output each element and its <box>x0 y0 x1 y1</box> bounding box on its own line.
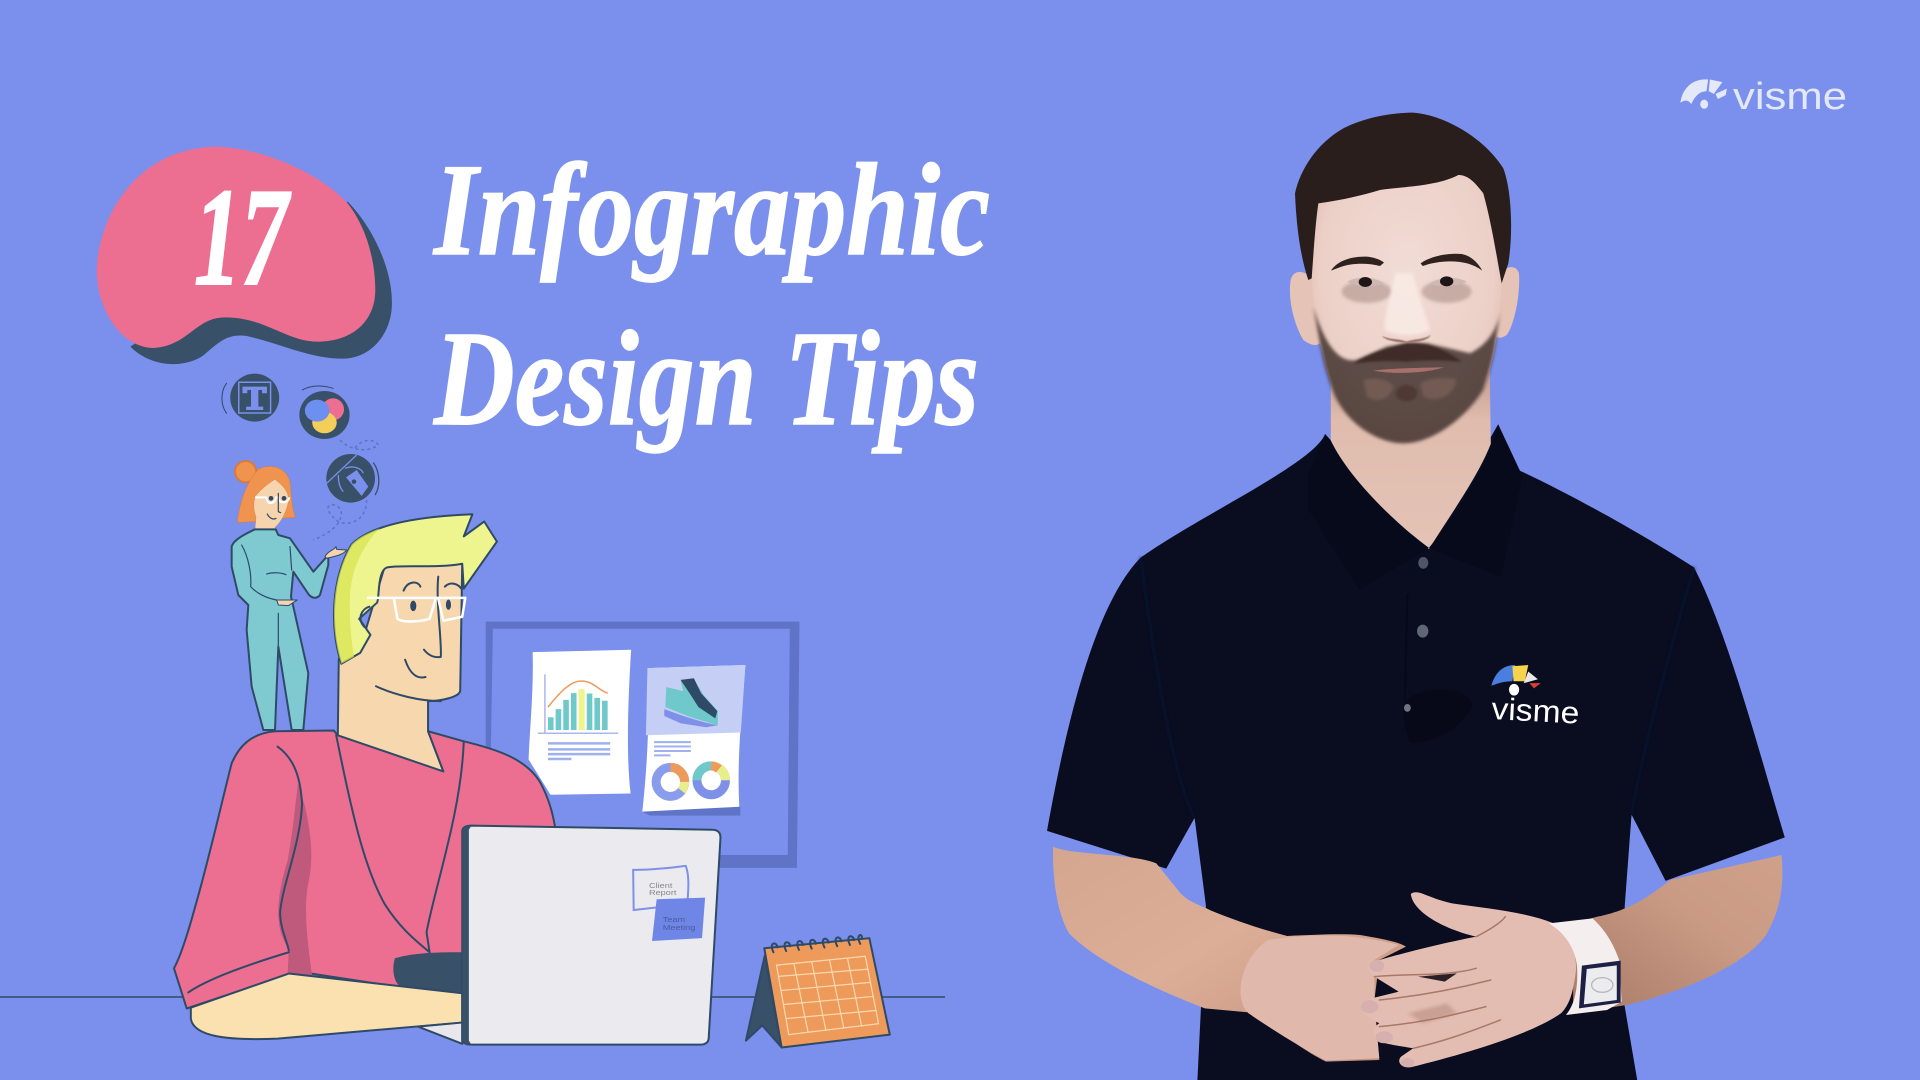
sticky note: filled: Team <box>663 916 685 924</box>
presenter head <box>1290 113 1519 443</box>
donut charts <box>656 766 726 796</box>
desk line <box>0 996 945 998</box>
beard light patches <box>1363 378 1457 400</box>
laptop <box>462 826 720 1045</box>
woman figure <box>232 461 347 730</box>
logo: visme <box>1680 76 1847 118</box>
badge blob <box>97 147 375 348</box>
calendar <box>746 935 890 1047</box>
man neck and face <box>334 514 497 771</box>
title <box>432 136 990 454</box>
badge blob shadow <box>130 202 392 364</box>
man pink shirt <box>174 730 556 1009</box>
badge: 17 <box>97 147 392 364</box>
glasses <box>367 598 465 621</box>
beard <box>1313 307 1502 443</box>
hair <box>1295 113 1511 283</box>
nose <box>1382 273 1431 343</box>
presenter left arm <box>1053 847 1406 1062</box>
presenter placket and buttons <box>1403 557 1473 743</box>
shirt logo mark <box>1491 665 1541 696</box>
moustache <box>1353 343 1462 363</box>
presenter neck <box>1331 366 1491 549</box>
shoe <box>664 678 718 727</box>
soul patch <box>1396 385 1417 401</box>
eye shadows <box>1342 280 1392 303</box>
illustration: designer at laptop <box>0 440 945 1047</box>
presenter right hand <box>1361 892 1576 1067</box>
lips <box>1373 367 1444 373</box>
eyebrows <box>1331 254 1482 271</box>
man hair <box>334 514 497 664</box>
badge number: 17 <box>194 160 291 315</box>
presenter right arm <box>1573 855 1782 1013</box>
icons: design tools <box>222 374 350 439</box>
presenter <box>1047 113 1785 1080</box>
left hand shading <box>1240 935 1399 1061</box>
sticky note: filled: Meeting <box>663 924 696 932</box>
icon: pen tool <box>313 440 379 540</box>
presenter collar <box>1308 424 1523 590</box>
presenter ears <box>1290 267 1519 345</box>
shirt folds <box>1141 558 1694 818</box>
woman with pen icon <box>232 440 379 730</box>
poster shadow <box>642 807 740 816</box>
poster: shoe and donuts <box>642 665 745 812</box>
sticky note: outline: Report <box>649 889 677 897</box>
title line 1: Infographic <box>432 136 990 283</box>
logo: visme: visme <box>1733 76 1847 118</box>
laptop keyboard edge <box>418 1023 462 1044</box>
presenter neck and collar <box>1308 366 1541 743</box>
sticky note: outline: Client <box>649 882 673 890</box>
shirt logo wordmark: visme <box>1491 691 1580 731</box>
presenter polo shirt <box>1047 424 1785 1080</box>
man facial features <box>376 577 461 701</box>
presenter watch <box>1549 918 1622 1015</box>
sticky note: outline <box>633 866 688 910</box>
picture frame on wall <box>486 622 799 868</box>
icon: colour circles <box>299 386 350 439</box>
icon: typography <box>222 374 279 422</box>
poster: bar chart <box>529 650 631 795</box>
presenter arms and hands <box>1053 847 1782 1067</box>
title line 2: Design Tips <box>433 304 979 454</box>
eyes <box>1347 276 1467 287</box>
man forearm <box>191 974 462 1039</box>
face skin <box>1312 157 1502 443</box>
sticky note: filled <box>652 898 705 941</box>
